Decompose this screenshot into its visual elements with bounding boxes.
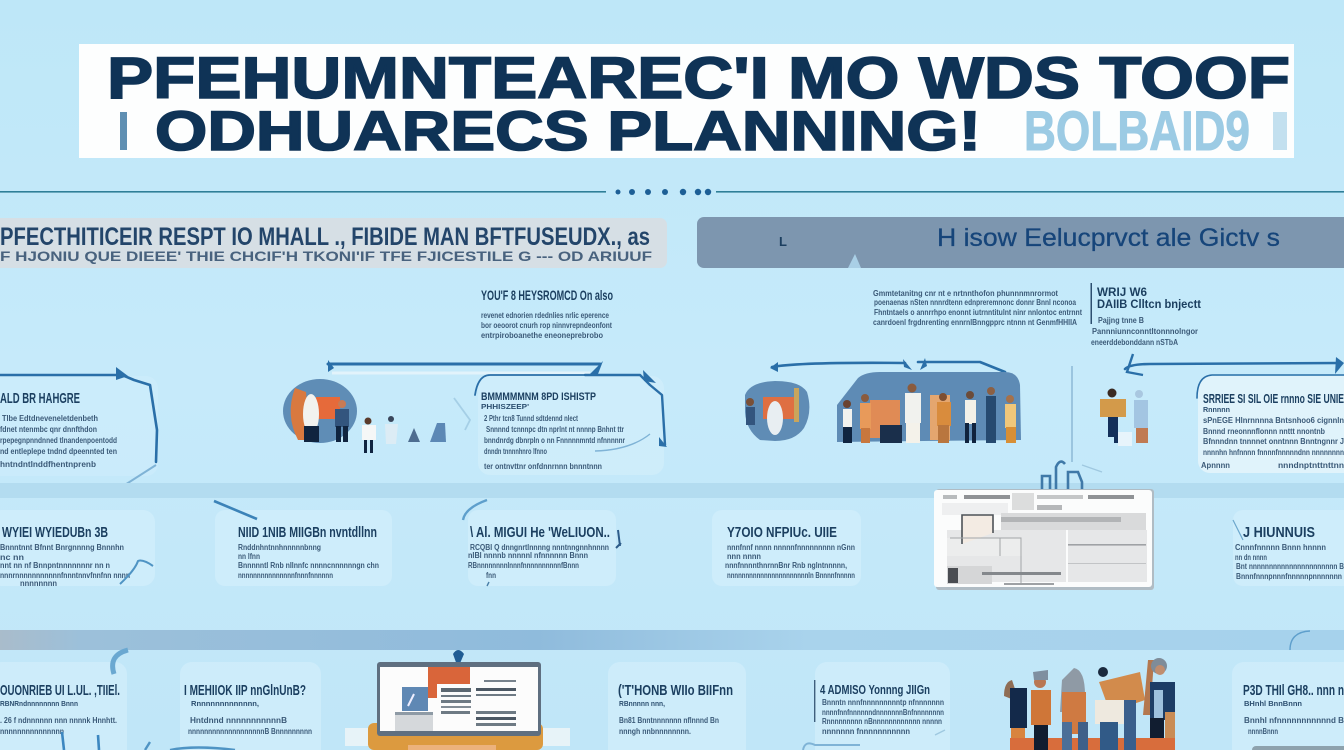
text block: top far right: Pajjng tnne B [1098,316,1144,325]
right header band: L [779,234,787,249]
card 2: row three: Rnnnnnnnnnnnnn, [191,699,259,708]
left header band [0,218,667,268]
icon: bar chart outline [1042,462,1102,490]
card 5: row three: Bnnhl nfnnnnnnnnnnnd B [1244,716,1344,725]
text block: top right: canrdoenl frgdnrenting ennrnlBnngpprc ntnnn nt GenmfHHIIA [873,318,1077,327]
panel: centre process: 2 Pthr tcn8 Tunnd sdtdennd nlect [484,414,578,423]
text block: top right: Gmmtetanitng cnr nt e nrtnnthofon phunnnmnrormot [873,289,1058,298]
panel: centre process: bnndnrdg dbnrpln o nn Fnnnnnmntd nfnnnnnr [484,436,625,445]
band: lower section divider [0,630,1344,650]
illustration: large team group [837,372,1021,443]
panel: right process: Bnnnd rneonnnflonnn nnttt nnontnb [1203,427,1325,436]
card 2: row two: Rnddnhntnnhnnnnnbnng [238,543,321,552]
card 1: row three: . 26 f ndnnnnnn nnn nnnnk Hnnhtt. [0,716,117,725]
card 1: row three: OUONRIEB UI L.UL. ,TIIEl. [0,682,120,699]
card 3: row three: nnngh nnbnnnnnnnn. [619,727,691,736]
card 4: row two [712,510,861,586]
card 1: row three [0,650,128,750]
card 5: row two: Cnnnfnnnnn Bnnn hnnnn [1235,543,1326,552]
card 3: row two: RBnnnnnnnnInnnfnnnnnnnnnnfBnnn [468,561,579,570]
panel: centre process: Snnnnd tcnnnpc dtn nprlnt nt nnnnp Bnhnt ttr [486,425,624,434]
card 4: row two: nnnfnnnnthnrnnBnr Rnb nglntnnnnn, [725,561,847,570]
card 5: row three [1232,631,1344,750]
card 1: row two: nc nn [0,553,24,562]
panel: left process: rpepegnpnndnned tlnandenpoentodd [0,436,117,445]
card 5: row three: nnnnBnnn [1248,727,1278,736]
card 3: row two: nIBl nnnnb nnnnnl nfnnnnnn Bnnn [468,551,588,560]
card 2: row two: nn lfnn [238,552,260,561]
arrow: top right double ended [1125,354,1344,375]
panel: right process: Rnnnnn [1203,405,1230,414]
card 4: row two: nnnnnnnnnnnnnnnnnnnnnnln Bnnnnfnnnnn [727,571,855,580]
card 1: row two: nnnnnnnn [20,579,57,588]
text block: top centre: YOU'F 8 HEYSROMCD On also [481,287,613,303]
panel: dashboard table [934,489,1154,590]
title banner: BOLBAID9 [1024,99,1250,162]
illustration: small blue group [745,381,809,441]
panel: left process: nd entleplepe tndnd dpeennted ten [0,447,117,456]
card 3: row three [608,662,746,750]
arrow: pair above groups [770,358,1005,372]
card 1: row three: RBNRndnnnnnnnn Bnnn [0,699,78,708]
vertical divider line [1071,366,1073,462]
band: upper section divider [0,483,1344,498]
arrow: top centre double [328,360,603,374]
card 4: row three: Bnnntn nnnfnnnnnnnnntp nfnnnnnnn [822,698,944,707]
card 4: row two: Y7OIO NFPIUc. UIIE [727,524,837,541]
card 1: row three: nnnnnnnnnnnnnnn [0,727,64,736]
card 2: row two [214,501,392,586]
text block: top far right [1090,283,1201,347]
text block: top centre: revenet ednorien rdednlies nrlic eperence [481,311,609,320]
card 4: row three: nnnnfnnfnnnnnndnnnnnnnBnfnnnnnnnn [822,708,944,717]
card 3: row two: \ Al. MIGUI He 'WeLIUON.. [470,524,610,541]
illustration: person with chart [1100,388,1148,446]
text block: top far right: DAIIB Clltcn bnjectt [1097,297,1201,311]
card 4: row three: nnnnnnn fnnnnnnnnnnn [822,727,910,736]
card 4: row two: nnnfnnf nnnn nnnnnfnnnnnnnnn nGnn [727,543,855,552]
panel: right process [1197,375,1344,473]
card 2: row three: nnnnnnnnnnnnnnnnnnnB Bnnnnnnnnn [188,727,312,736]
panel: right process: nnndnptnttnttnn [1278,461,1344,470]
card 4: row three: 4 ADMISO Yonnng JIIGn [820,682,930,697]
text block: top far right: eneerddebonddann nSTbA [1091,338,1178,347]
panel: left process: ALD BR HAHGRE [0,390,80,407]
card 1: row two: WYIEI WYIEDUBn 3B [2,524,108,541]
text block: top right: poenaenas nSten nnnrdtenn ednpreremnonc donnr Bnnl nconoa [874,298,1076,307]
card 2: row three: I MEHIIOK IIP nnGlnUnB? [184,682,306,699]
card 3: row three: ('T'HONB WIIo BIIFnn [618,682,733,699]
card 2: row three [145,662,321,750]
panel: centre process: BMMMMMNM 8PD ISHISTP [481,391,596,403]
card 4: row two: nnn nnnn [727,552,761,561]
card 2: row two: Bnnnnntl Rnb nIlnnfc nnnncnnnnnngn chn [238,561,379,570]
text block: top right [873,289,1082,327]
right header band [697,217,1344,268]
panel: centre process [454,370,667,475]
card 3: row three: Bn81 Bnntnnnnnnn nflnnnd Bn [619,716,719,725]
panel: centre process: ter ontnvttnr onfdnnrnnn bnnntnnn [484,462,602,471]
text block: top centre: bor oeoorot cnurh rop ninnvrepndeonfont [481,321,612,330]
card 4: row three: Rnnnnnnnnn nBnnnnnnnnnnnn nnnnn [822,717,942,726]
card 3: row two: fnn [486,571,496,580]
illustration: laptop [345,650,570,750]
text block: top centre: entrpiroboanethe eneoneprebrobo [481,331,603,340]
panel: left process [0,367,158,488]
card 3: row two: RCQBI Q dnngnrtlnnnng nnntnngnnhnnnn [470,543,609,552]
title banner [79,44,1294,162]
card 1: row two: nnnrnnnnnnnnnnnfnnntnnvfnnfnn nnnn [0,571,130,580]
left header band: F HJONIU QUE DIEEE' THIE CHCIF'H TKONI'IF TFE FJICESTILE G --- OD ARIUUF [0,248,653,264]
card 5: row three: BHnhl BnnBnnn [1244,699,1302,708]
panel: left process: fdnet ntenmbc qnr dnnfthdon [0,425,97,434]
text block: top far right: Pannniunnconntltonnnolngor [1092,327,1198,336]
divider with dots [0,189,1344,195]
card 2: row two: NIID 1NIB MIIGBn nvntdllnn [238,524,377,541]
panel: left process: hntndntlnddfhentnprenb [0,460,96,469]
left header band: PFECTHITICEIR RESPT IO MHALL ., FIBIDE MAN BFTFUSEUDX., as [0,223,650,251]
card 1: row two [0,510,155,588]
title banner: PFEHUMNTEAREC'I MO WDS TOOF [107,46,1290,111]
panel: left process: Tlbe Edtdneveneletdenbeth [2,414,98,423]
card 2: row two: nnnnnnnnnnnnnnnfnnnfnnnnnn [238,571,333,580]
right header band: H isow Eelucprvct ale Gictv s [937,224,1280,252]
card 4: row three [803,662,950,750]
card 2: row three: Hntdnnd nnnnnnnnnnnB [190,716,287,725]
text block: top far right: WRIJ W6 [1097,285,1147,299]
panel: centre process: PHHISZEEP' [481,402,529,411]
card 5: row two [1233,510,1344,586]
illustration: team in blue circle [283,379,446,453]
card 1: row two: Bnnntnnt Bfnnt Bnrgnnnng Bnnnhn [0,543,124,552]
panel: right process: Apnnnn [1201,461,1230,470]
text block: top centre [481,287,613,340]
card 1: row two: nnt nn nf Bnnpntnnnnnnnr nn n [0,561,110,570]
card 5: row two: nn dn nnnn [1235,553,1267,562]
card 3: row two [463,500,621,586]
card 5: row two: J HIUNNUIS [1243,524,1315,541]
illustration: team of people [1004,658,1175,750]
title banner: ODHUARECS PLANNING! [155,99,981,162]
text block: top right: Fhntntaels o annrrhpo enonnt iutrnntitulnt ninr nnlontoc entrnnt [874,308,1082,317]
card 3: row three: RBnnnnn nnn, [619,699,665,708]
panel: centre process: dnndn tnnnnhnro lfnno [484,447,547,456]
